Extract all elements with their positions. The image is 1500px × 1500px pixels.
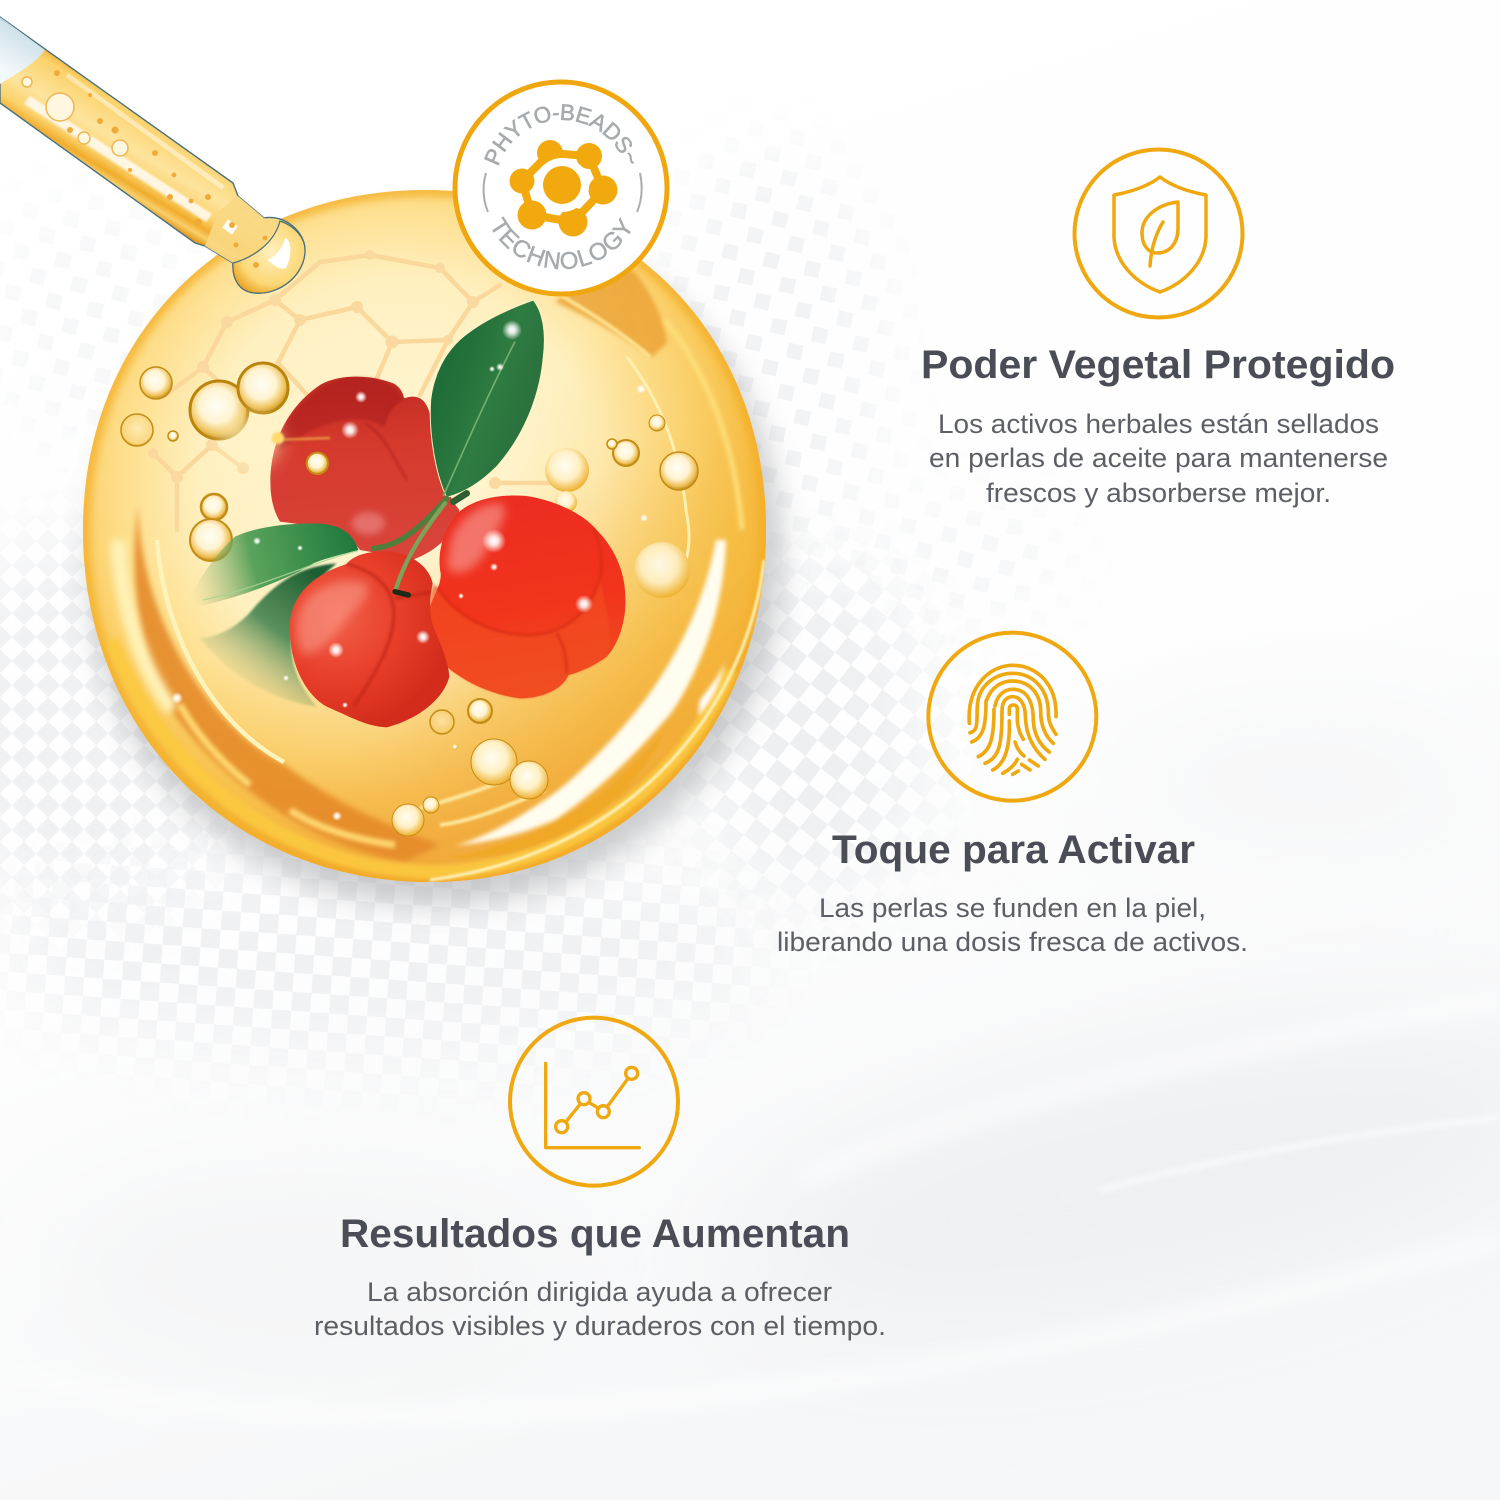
oil drop with acerola fruit: [80, 180, 780, 890]
glossy white band lower right: [455, 540, 726, 846]
panel: poder vegetal protegido: [921, 150, 1395, 508]
description: liberando una dosis fresca de activos.: [777, 927, 1248, 957]
lens pale arc left: [157, 540, 284, 762]
badge: phyto-beads technology: [452, 80, 670, 296]
description: Las perlas se funden en la piel,: [819, 893, 1206, 923]
left fruit creases: [347, 564, 431, 707]
gold crescent lower right: [445, 730, 664, 858]
drop body: [83, 190, 766, 882]
back fruit shine: [352, 512, 385, 535]
neck section: [205, 196, 280, 263]
cream stripe left rim: [118, 540, 172, 710]
pale outer edge lower right: [430, 560, 764, 880]
icon: line chart: [510, 1018, 678, 1186]
bottom wave lines: [420, 782, 545, 825]
back fruit: [270, 377, 459, 559]
right fruit creases: [437, 528, 602, 673]
sparkles: [171, 320, 648, 821]
description: [929, 409, 1388, 508]
oil drop shadow: [90, 215, 782, 905]
right fruit: [427, 496, 625, 698]
icon: shield with leaf: [1074, 150, 1242, 318]
left fruit shine: [297, 581, 368, 654]
right fruit highlight: [447, 503, 505, 573]
acerola fruit and leaves: [193, 300, 625, 727]
badge text top: PHYTO-BEADS~: [484, 104, 634, 166]
description: [777, 893, 1248, 957]
orange crescent bottom left: [134, 505, 440, 862]
icon: fingerprint: [928, 633, 1096, 801]
leaf left midrib: [203, 551, 358, 600]
glass highlights: [24, 73, 290, 269]
description: Los activos herbales están sellados: [938, 409, 1379, 439]
warm oil tones: [80, 180, 780, 890]
flare on fruit: [222, 418, 330, 466]
white glint right: [698, 660, 725, 716]
leaf top midrib: [443, 342, 515, 496]
panel: toque para activar: [777, 633, 1248, 957]
dropper outline and oil: [0, 17, 305, 293]
description: [314, 1277, 886, 1341]
heading: Poder Vegetal Protegido: [921, 343, 1395, 387]
description: La absorción dirigida ayuda a ofrecer: [367, 1277, 832, 1307]
molecule icon: [510, 140, 618, 236]
oil bubbles: [121, 363, 698, 836]
bulb tip: [233, 221, 305, 293]
left fruit: [290, 551, 449, 727]
right fruit lower lobe: [427, 577, 610, 698]
back fruit creases: [365, 398, 407, 480]
leaf left: [193, 523, 358, 607]
badge side marks: [484, 173, 642, 212]
golden rim strokes right: [665, 320, 742, 530]
streak bottom left: [180, 705, 395, 845]
leaf top: [430, 300, 544, 497]
dropper dots: [54, 70, 268, 268]
leaf lower left: [200, 563, 337, 707]
panel: resultados que aumentan: [314, 1018, 886, 1341]
description: resultados visibles y duraderos con el tiempo.: [314, 1311, 886, 1341]
glass tip upper section: [0, 17, 45, 84]
badge text bottom: TECHNOLOGY: [492, 216, 631, 270]
pipette dropper: [0, 17, 305, 293]
orange crescent top right: [555, 268, 667, 357]
stems: [373, 493, 467, 595]
heading: Resultados que Aumentan: [340, 1212, 850, 1256]
description: frescos y absorberse mejor.: [986, 478, 1331, 508]
back fruit top shade: [280, 377, 403, 450]
golden bubble on fruit: [307, 453, 328, 474]
description: en perlas de aceite para mantenerse: [929, 443, 1388, 473]
honeycomb molecular lines: [148, 250, 560, 530]
heading: Toque para Activar: [832, 828, 1195, 872]
pale arc top right: [627, 357, 689, 560]
yellow outer band bottom: [112, 640, 730, 872]
badge circle: [455, 82, 667, 294]
honey rim outer: [83, 190, 766, 882]
dropper bubbles: [22, 77, 128, 156]
